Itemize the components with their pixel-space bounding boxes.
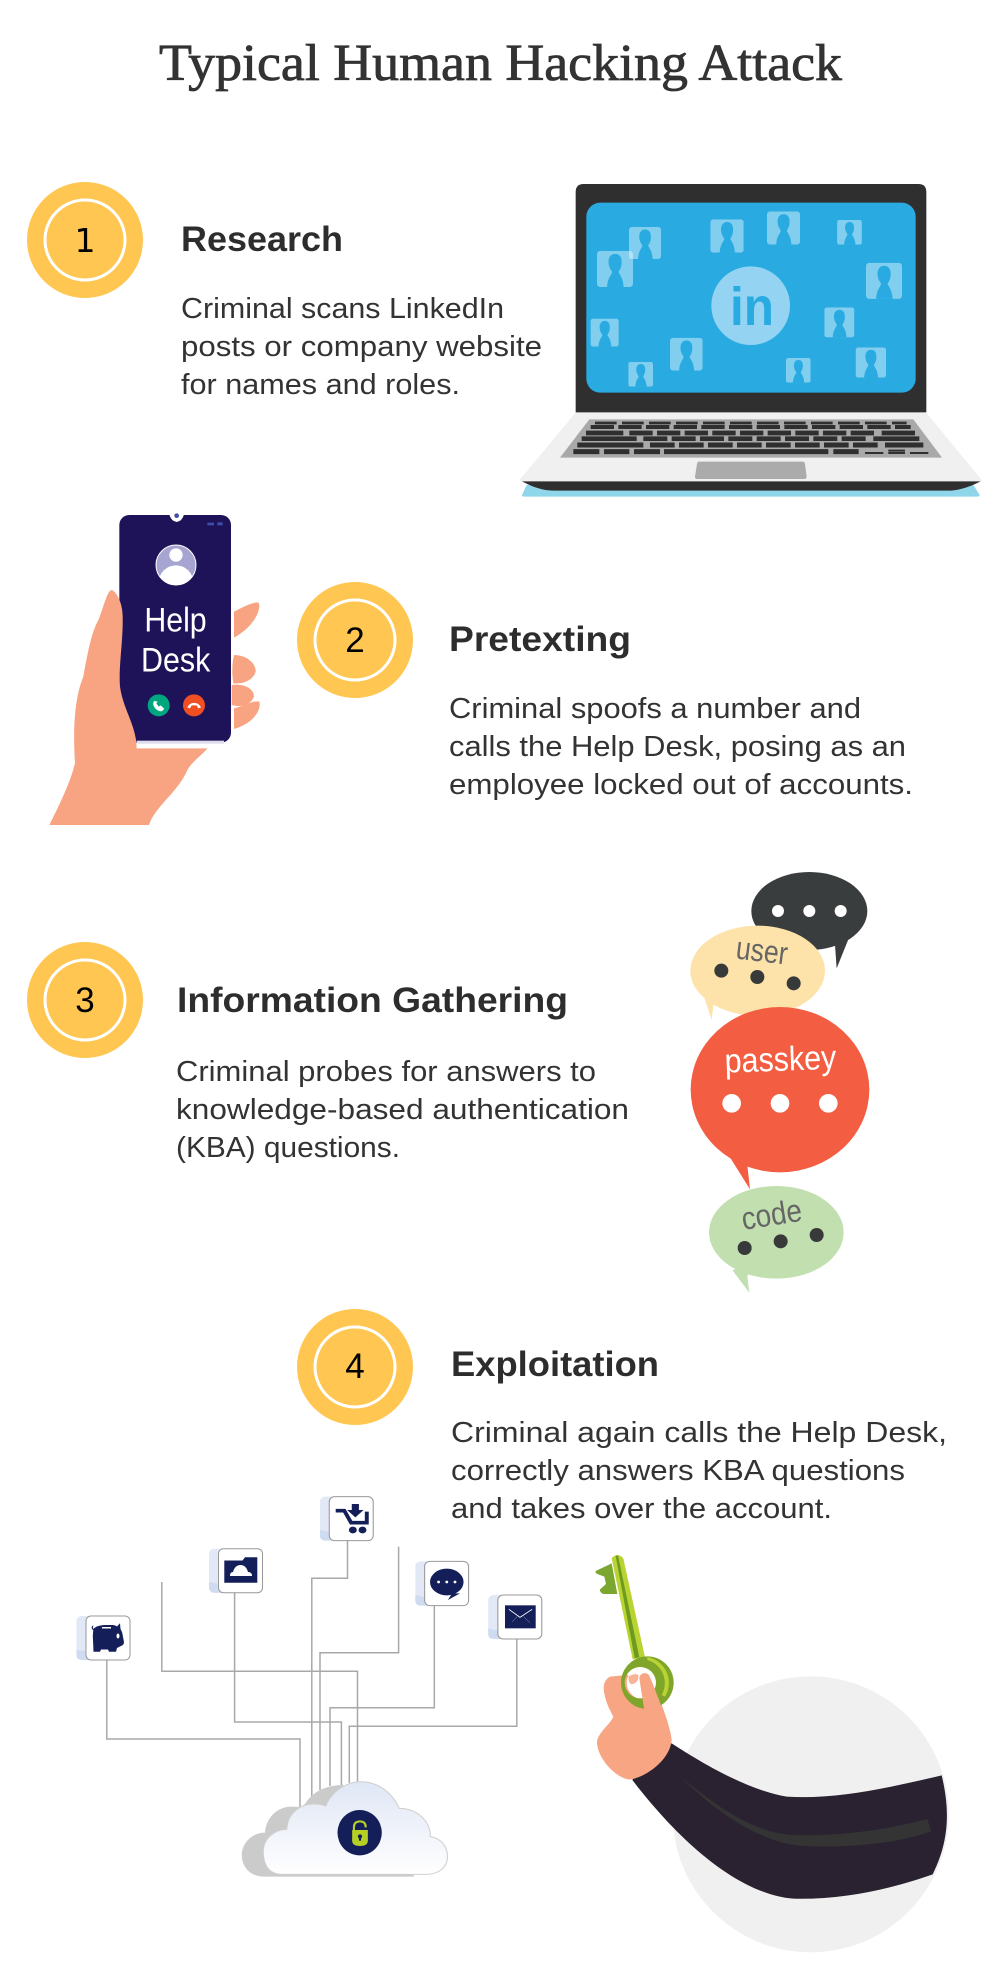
panel: step 2 pretexting	[49, 513, 913, 825]
bubble: passkey	[691, 1007, 869, 1189]
step number 4	[297, 1309, 413, 1425]
text: research description: Criminal scans LinkedIn	[181, 293, 504, 325]
icon: piggy bank tile	[76, 1616, 130, 1660]
bubble: code	[709, 1186, 844, 1293]
text: pretexting description: employee locked out of accounts.	[449, 769, 913, 801]
heading: information gathering: Information Gathering	[177, 981, 568, 1020]
step number 3: 3	[75, 981, 95, 1020]
icon: shopping cart tile	[320, 1497, 373, 1541]
step number 2	[297, 582, 413, 698]
heading: pretexting: Pretexting	[449, 620, 631, 659]
text: pretexting description	[449, 693, 913, 801]
text: exploitation description	[451, 1417, 947, 1525]
step number 3	[27, 942, 143, 1058]
bubble: user	[690, 926, 825, 1020]
text: information gathering description: knowledge-based authentication	[176, 1094, 629, 1126]
icon: cloud with unlocked padlock	[242, 1782, 447, 1877]
panel: step 4 exploitation	[76, 1309, 949, 1952]
step number 1	[27, 182, 143, 298]
step number 1: 1	[74, 221, 96, 260]
title: Typical Human Hacking Attack	[159, 35, 842, 92]
text: research description	[181, 293, 542, 401]
icon: laptop with LinkedIn profiles	[520, 184, 982, 497]
step number 2: 2	[345, 621, 365, 660]
icon: chat tile	[415, 1561, 469, 1606]
diagram: connection lines to cloud	[107, 1541, 517, 1807]
step number 4: 4	[345, 1347, 365, 1386]
text: information gathering description: (KBA) questions.	[176, 1132, 400, 1164]
text: pretexting description: Criminal spoofs a number and	[449, 693, 861, 725]
text: research description: for names and roles.	[181, 369, 460, 401]
heading: exploitation: Exploitation	[451, 1345, 659, 1384]
icon: laptop with LinkedIn profiles: in	[730, 278, 774, 337]
text: information gathering description	[176, 1056, 629, 1164]
panel: step 3 information gathering	[27, 872, 869, 1293]
text: exploitation description: Criminal again calls the Help Desk,	[451, 1417, 947, 1449]
icon: hand holding phone	[49, 513, 260, 825]
text: research description: posts or company website	[181, 331, 542, 363]
panel: step 1 research	[27, 182, 982, 497]
bubble: passkey: passkey	[724, 1039, 837, 1081]
bubble: code: code	[739, 1192, 804, 1237]
bubble: user: user	[734, 930, 790, 972]
text: exploitation description: and takes over the account.	[451, 1493, 832, 1525]
icon: speech bubbles	[690, 872, 869, 1293]
icon: hand holding phone: Desk	[141, 642, 211, 680]
icon: folder cloud tile	[209, 1549, 262, 1593]
bubble: dark	[751, 872, 867, 968]
icon: hand holding key	[596, 1555, 949, 1952]
text: information gathering description: Criminal probes for answers to	[176, 1056, 596, 1088]
icon: hand holding phone: Help	[144, 602, 207, 640]
heading: research: Research	[181, 220, 343, 259]
text: exploitation description: correctly answers KBA questions	[451, 1455, 905, 1487]
icon: mail tile	[488, 1595, 542, 1639]
text: pretexting description: calls the Help Desk, posing as an	[449, 731, 906, 763]
